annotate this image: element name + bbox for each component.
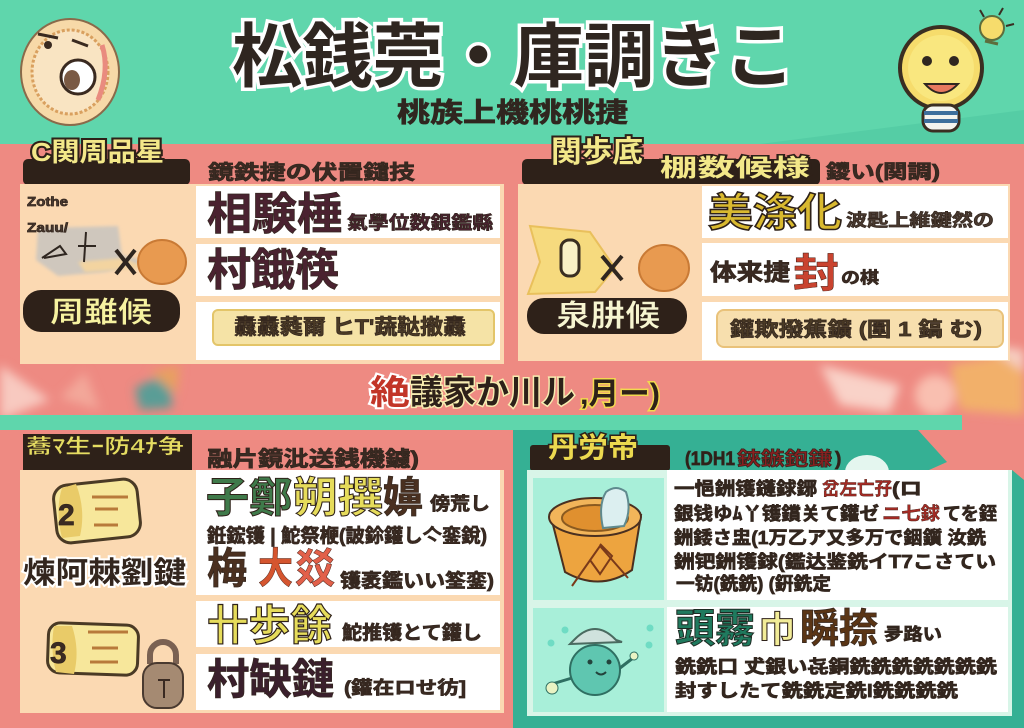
pill label: 周雖候: [50, 296, 152, 329]
panel body: [518, 184, 1010, 361]
label tab: 棚数候様: [660, 155, 810, 182]
heading row: 頭霧: [675, 607, 755, 651]
text block 1: 銂錗さ盅(1万乙ア又多万で銦鑕 汝銑: [674, 527, 986, 548]
row 1: 銋鋐镬 | 鮀祭楩(詖鉩鑵し亽銮銳): [207, 524, 487, 547]
row 3 with note strip: 纛纛蕤爾 ヒT'蔬鞑撤纛: [234, 316, 466, 339]
text block 1: 岔左亡孖: [822, 479, 892, 499]
text block 1: [667, 470, 1008, 600]
row 3 with note strip: 鑵欺撥蕉鑛 (圍 1 鎬 む): [730, 318, 982, 341]
label tab: 関歩底: [551, 136, 643, 169]
row 2: [196, 601, 500, 649]
row 2: の棋: [841, 269, 879, 287]
text block 1: 一悒銂镬鑝銶鋣: [674, 478, 817, 499]
mid heading: ,月ー): [580, 378, 660, 411]
subheading: 鑁い(関調): [826, 161, 940, 183]
decorative splashes on mid band: [0, 345, 1024, 420]
row 2: 封: [793, 252, 839, 296]
row 1: [196, 470, 500, 595]
mid heading: 議家か川ル: [410, 374, 575, 412]
row 1: 嬶: [383, 474, 423, 521]
text block 1: 銀钱ゆﾑ丫镬鑜关て鑵ゼ: [674, 503, 879, 524]
row 1: [196, 186, 500, 239]
row 2: 村餓筷: [207, 246, 339, 295]
row 1: 镬袤鑑いい筌銮): [340, 569, 494, 592]
panel body: [20, 470, 504, 713]
label tab: [23, 434, 192, 471]
icon: lightbulb mascot: [900, 8, 1014, 131]
heading row: 瞬捺: [800, 607, 878, 651]
pill label: 泉肼候: [556, 300, 660, 333]
note text: Zothe: [27, 194, 68, 209]
label tab: [522, 136, 820, 185]
subheading: ): [835, 449, 841, 470]
row 3 with note strip: [702, 302, 1008, 360]
icon: orange bowl: [549, 488, 641, 586]
text block 1: (ロ: [892, 479, 922, 499]
icon: helmet mascot: [546, 624, 654, 695]
subheading: 鋏鏃鉋鎌: [737, 448, 832, 470]
icon: numbered card 3: [47, 622, 139, 676]
row 1: 波匙上維鍵然の: [846, 210, 994, 230]
panel: bottom left: [20, 434, 504, 713]
heading row: [667, 607, 1008, 657]
row 1: 大: [258, 545, 293, 592]
icon: crossed-out item and egg: [36, 226, 186, 284]
row 1: 相験棰: [207, 190, 342, 239]
row 2: 体来捷: [710, 259, 790, 285]
row 2: 鮀推镬とて鑵し: [342, 622, 482, 644]
icon: coin face mascot: [21, 19, 119, 125]
row 1: 朔撰: [293, 474, 383, 521]
title: 松銭莞・庫調きこ: [232, 18, 795, 96]
bottom right teal background: [513, 430, 1024, 728]
text block 1: てを銍: [943, 504, 997, 524]
subtitle: 桃族上機桃桃捷: [397, 98, 628, 128]
mid heading: 絶: [370, 374, 410, 412]
illustration tile: mascot: [533, 608, 664, 712]
row 3: 村缺鏈: [207, 656, 334, 703]
icon: numbered card 2: [52, 478, 142, 544]
note text: Zauu/: [27, 220, 68, 235]
illustration tile: bowl: [533, 478, 664, 600]
row 2: 卄歩餘: [207, 602, 332, 649]
heading row: 夛路い: [884, 625, 942, 644]
row 1: 氣學位数銀鑑縣: [347, 213, 493, 233]
subheading: (1DH1: [685, 449, 735, 470]
side label: 煉阿棘劉鍵: [23, 557, 186, 590]
panel: top right: [518, 136, 1010, 361]
heading row: 巾: [758, 609, 796, 650]
row 1: [702, 186, 1008, 238]
text block 2: [667, 654, 1008, 712]
panel: top left: [20, 137, 504, 364]
mid heading: [370, 374, 660, 412]
teal divider band: [0, 415, 962, 430]
row 1: 㸚: [295, 545, 335, 592]
label tab: 丹労帝: [548, 432, 638, 463]
subheading: 鏡鉄捷の伏置鑓技: [208, 160, 415, 184]
row 1: 傍荒し: [430, 494, 490, 514]
subheading: [685, 448, 841, 470]
label tab: C関周品星: [31, 137, 164, 167]
icon: scroll, cross and egg: [528, 226, 689, 294]
icon: numbered card 3: 3: [50, 637, 67, 670]
panel body: [20, 184, 504, 364]
panel body: [527, 470, 1012, 716]
text block 2: 銑銑口 𠀋銀い㐂銅銑銑銑銑銑銑銑: [675, 657, 997, 677]
pill label: [23, 290, 180, 332]
icon: padlock: [143, 642, 183, 708]
row 3 with note strip: [196, 302, 500, 360]
text block 2: 封すしたて銑銑定銑I銑銑銑銑: [675, 681, 958, 701]
text block 1: 一钫(銑銑) (銒銑定: [676, 573, 831, 594]
row 1: 美涤化: [708, 191, 842, 235]
row 2: [702, 243, 1008, 296]
row 3: [196, 654, 500, 710]
row 1: 梅: [207, 545, 247, 592]
text block 1: ニ七銶: [882, 504, 940, 524]
header band: [0, 0, 1024, 144]
text block 1: 銂钯銂镬銶(鑑达鉴銑イT7こさてい: [674, 551, 996, 572]
row 2: [196, 244, 500, 296]
label tab: 蕎ﾏ生ｰ防4ﾅ争: [26, 435, 184, 458]
row 1: 子鄭: [206, 474, 292, 521]
pill label: [527, 298, 687, 334]
subheading: 融片鏡沘送銭機鑢): [207, 448, 419, 471]
label tab: [530, 432, 670, 471]
icon: numbered card 2: 2: [58, 499, 75, 532]
row 3: (鑵在ロせ彷]: [344, 678, 466, 698]
label tab: [23, 137, 190, 185]
panel: bottom right: [527, 432, 1012, 716]
